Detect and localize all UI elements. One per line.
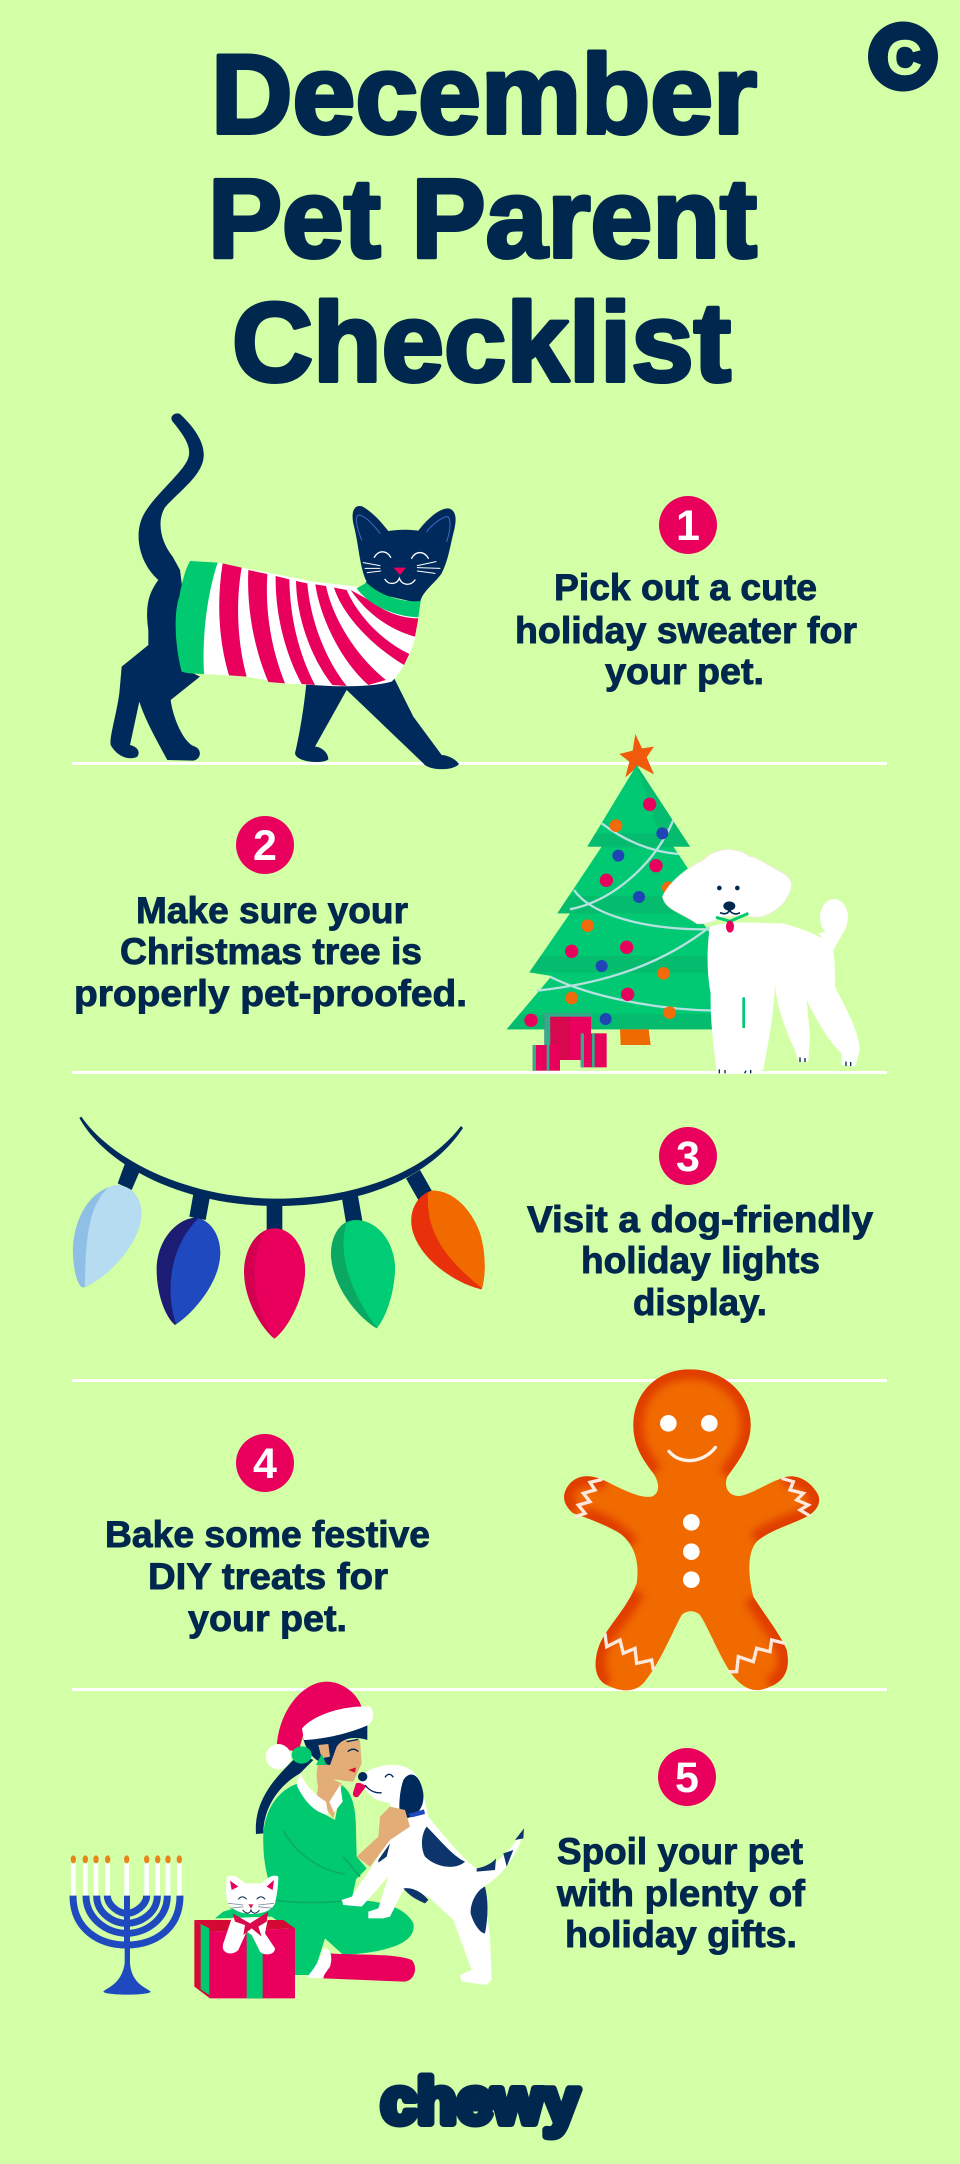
icon: chewy C logo badge bbox=[868, 22, 938, 92]
step 3: display. bbox=[633, 1282, 767, 1323]
step 2: 2 bbox=[253, 822, 277, 870]
icon: chewy C logo badge: C bbox=[887, 32, 921, 85]
step 3: 3 bbox=[676, 1133, 700, 1181]
step 2: Christmas tree is bbox=[120, 931, 422, 972]
tree bbox=[506, 765, 712, 1030]
section dividers bbox=[72, 762, 887, 1691]
title: Checklist bbox=[232, 280, 731, 405]
step 4: 4 bbox=[253, 1440, 277, 1488]
illustration: woman with dog, kitten in gift and menorah bbox=[71, 1682, 524, 1998]
green bulb bbox=[331, 1220, 395, 1328]
star bbox=[619, 734, 654, 777]
title: Pet Parent bbox=[208, 156, 757, 281]
illustration: Christmas tree with white poodle bbox=[503, 734, 860, 1073]
illustration: gingerbread man bbox=[564, 1369, 819, 1690]
step 1: Pick out a cute bbox=[554, 567, 817, 608]
dog bbox=[342, 1765, 524, 1985]
red bulb bbox=[244, 1228, 305, 1339]
woman hand bbox=[357, 1807, 410, 1867]
step 3 bbox=[527, 1127, 873, 1323]
sweater body bbox=[176, 561, 421, 686]
woman head bbox=[256, 1682, 373, 1834]
step 5: with plenty of bbox=[556, 1873, 806, 1914]
step 5: Spoil your pet bbox=[557, 1831, 803, 1872]
step 5: holiday gifts. bbox=[565, 1914, 797, 1955]
step 1: 1 bbox=[676, 502, 700, 550]
step 2: Make sure your bbox=[136, 890, 408, 931]
poodle bbox=[663, 850, 860, 1073]
cat face bbox=[356, 515, 450, 584]
step 4 bbox=[105, 1434, 430, 1639]
ornaments bbox=[524, 798, 663, 1027]
step 2: properly pet-proofed. bbox=[74, 973, 467, 1014]
gifts bbox=[533, 1013, 607, 1071]
dark edge shading bbox=[564, 1369, 819, 1687]
gift box bbox=[194, 1920, 295, 1998]
blue bulb bbox=[157, 1217, 220, 1325]
illustration: black cat in striped sweater bbox=[110, 413, 459, 769]
step 5 bbox=[556, 1748, 806, 1955]
step 4: Bake some festive bbox=[105, 1514, 430, 1555]
woman body bbox=[215, 1773, 415, 1982]
step 3: holiday lights bbox=[581, 1240, 820, 1281]
icing zigzags bbox=[575, 1478, 810, 1672]
illustration: string of holiday lights bbox=[73, 1117, 485, 1339]
step 1: your pet. bbox=[605, 651, 764, 692]
chewy logo wordmark: chewy bbox=[381, 2065, 579, 2137]
title: December bbox=[211, 32, 757, 157]
orange bulb bbox=[411, 1191, 485, 1289]
title bbox=[208, 32, 757, 405]
light blue bulb bbox=[73, 1185, 141, 1288]
gingerbread face and buttons bbox=[660, 1415, 718, 1588]
step 3: Visit a dog-friendly bbox=[527, 1199, 873, 1240]
step 4: DIY treats for bbox=[148, 1556, 388, 1597]
step 1: holiday sweater for bbox=[515, 610, 857, 651]
garlands bbox=[537, 820, 717, 1011]
kitten bbox=[223, 1876, 278, 1954]
wire and sockets bbox=[79, 1117, 463, 1230]
step 2 bbox=[74, 816, 467, 1014]
step 4: your pet. bbox=[188, 1598, 347, 1639]
menorah bbox=[71, 1855, 182, 1995]
step 1 bbox=[515, 496, 857, 692]
trunk bbox=[620, 1029, 651, 1045]
step 5: 5 bbox=[675, 1754, 699, 1802]
